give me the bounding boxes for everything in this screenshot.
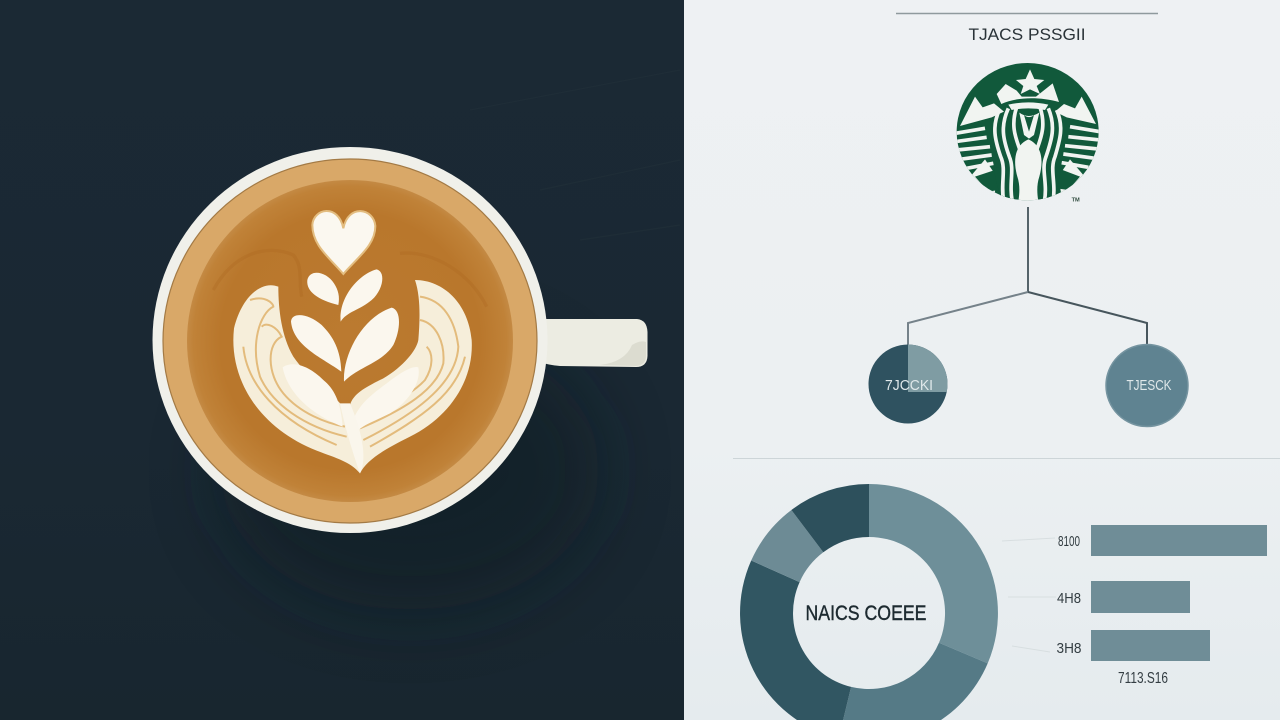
panel: dark slate background bbox=[0, 0, 684, 720]
donut segment 3 bbox=[740, 560, 851, 720]
heading: TJACS PSSGII bbox=[968, 25, 1086, 44]
donut segment 4 bbox=[751, 510, 823, 582]
latte art middle leaves bbox=[291, 315, 341, 372]
node: left circle bbox=[868, 344, 948, 424]
latte art tulip bbox=[213, 211, 487, 473]
donut chart bbox=[740, 484, 998, 720]
top rule bbox=[896, 12, 1158, 14]
latte art center stem bbox=[340, 403, 363, 473]
donut segment 5 bbox=[791, 484, 869, 552]
bar 2 bbox=[1057, 581, 1190, 613]
latte art wings bbox=[233, 280, 472, 473]
latte art heart bbox=[312, 211, 375, 274]
donut center label: NAICS COEEE bbox=[806, 602, 926, 625]
tree connector lines bbox=[908, 207, 1147, 346]
bar chart caption: 7113.S16 bbox=[1118, 670, 1168, 687]
logo side peaks bbox=[960, 97, 1004, 126]
donut segment 2 bbox=[839, 643, 988, 720]
node: right circle bbox=[1106, 344, 1188, 426]
section divider bbox=[733, 458, 1280, 460]
donut segment 1 bbox=[869, 484, 998, 663]
icon: cup handle bbox=[540, 319, 648, 367]
bar 3 bbox=[1056, 630, 1210, 661]
node: left circle: 7JCCKI bbox=[885, 377, 933, 394]
logo lower panels bbox=[972, 160, 996, 192]
logo trademark: TM bbox=[1072, 197, 1080, 203]
logo crown bbox=[997, 83, 1059, 104]
latte art upper leaves bbox=[307, 273, 339, 305]
cup body white rim bbox=[152, 147, 548, 533]
bar 1 bbox=[1058, 525, 1267, 556]
coffee surface bbox=[187, 180, 513, 502]
logo star bbox=[1016, 69, 1044, 94]
bar 3: 3H8 bbox=[1056, 640, 1082, 657]
latte art lower leaves bbox=[283, 364, 343, 427]
bar chart bbox=[1002, 525, 1267, 687]
logo hair waves bbox=[996, 175, 1017, 200]
panel: right information sheet bbox=[684, 0, 1280, 720]
darker crema swirls bbox=[213, 250, 487, 307]
coffee cup illustration bbox=[152, 147, 648, 533]
icon: green siren logo bbox=[956, 63, 1099, 202]
logo tail fins bbox=[955, 127, 1100, 168]
bar 1: 8100 bbox=[1058, 533, 1080, 550]
bar 2: 4H8 bbox=[1057, 590, 1081, 607]
logo central body bbox=[1015, 139, 1042, 207]
cup inner wall bbox=[163, 159, 537, 523]
node: right circle: TJESCK bbox=[1126, 377, 1172, 394]
